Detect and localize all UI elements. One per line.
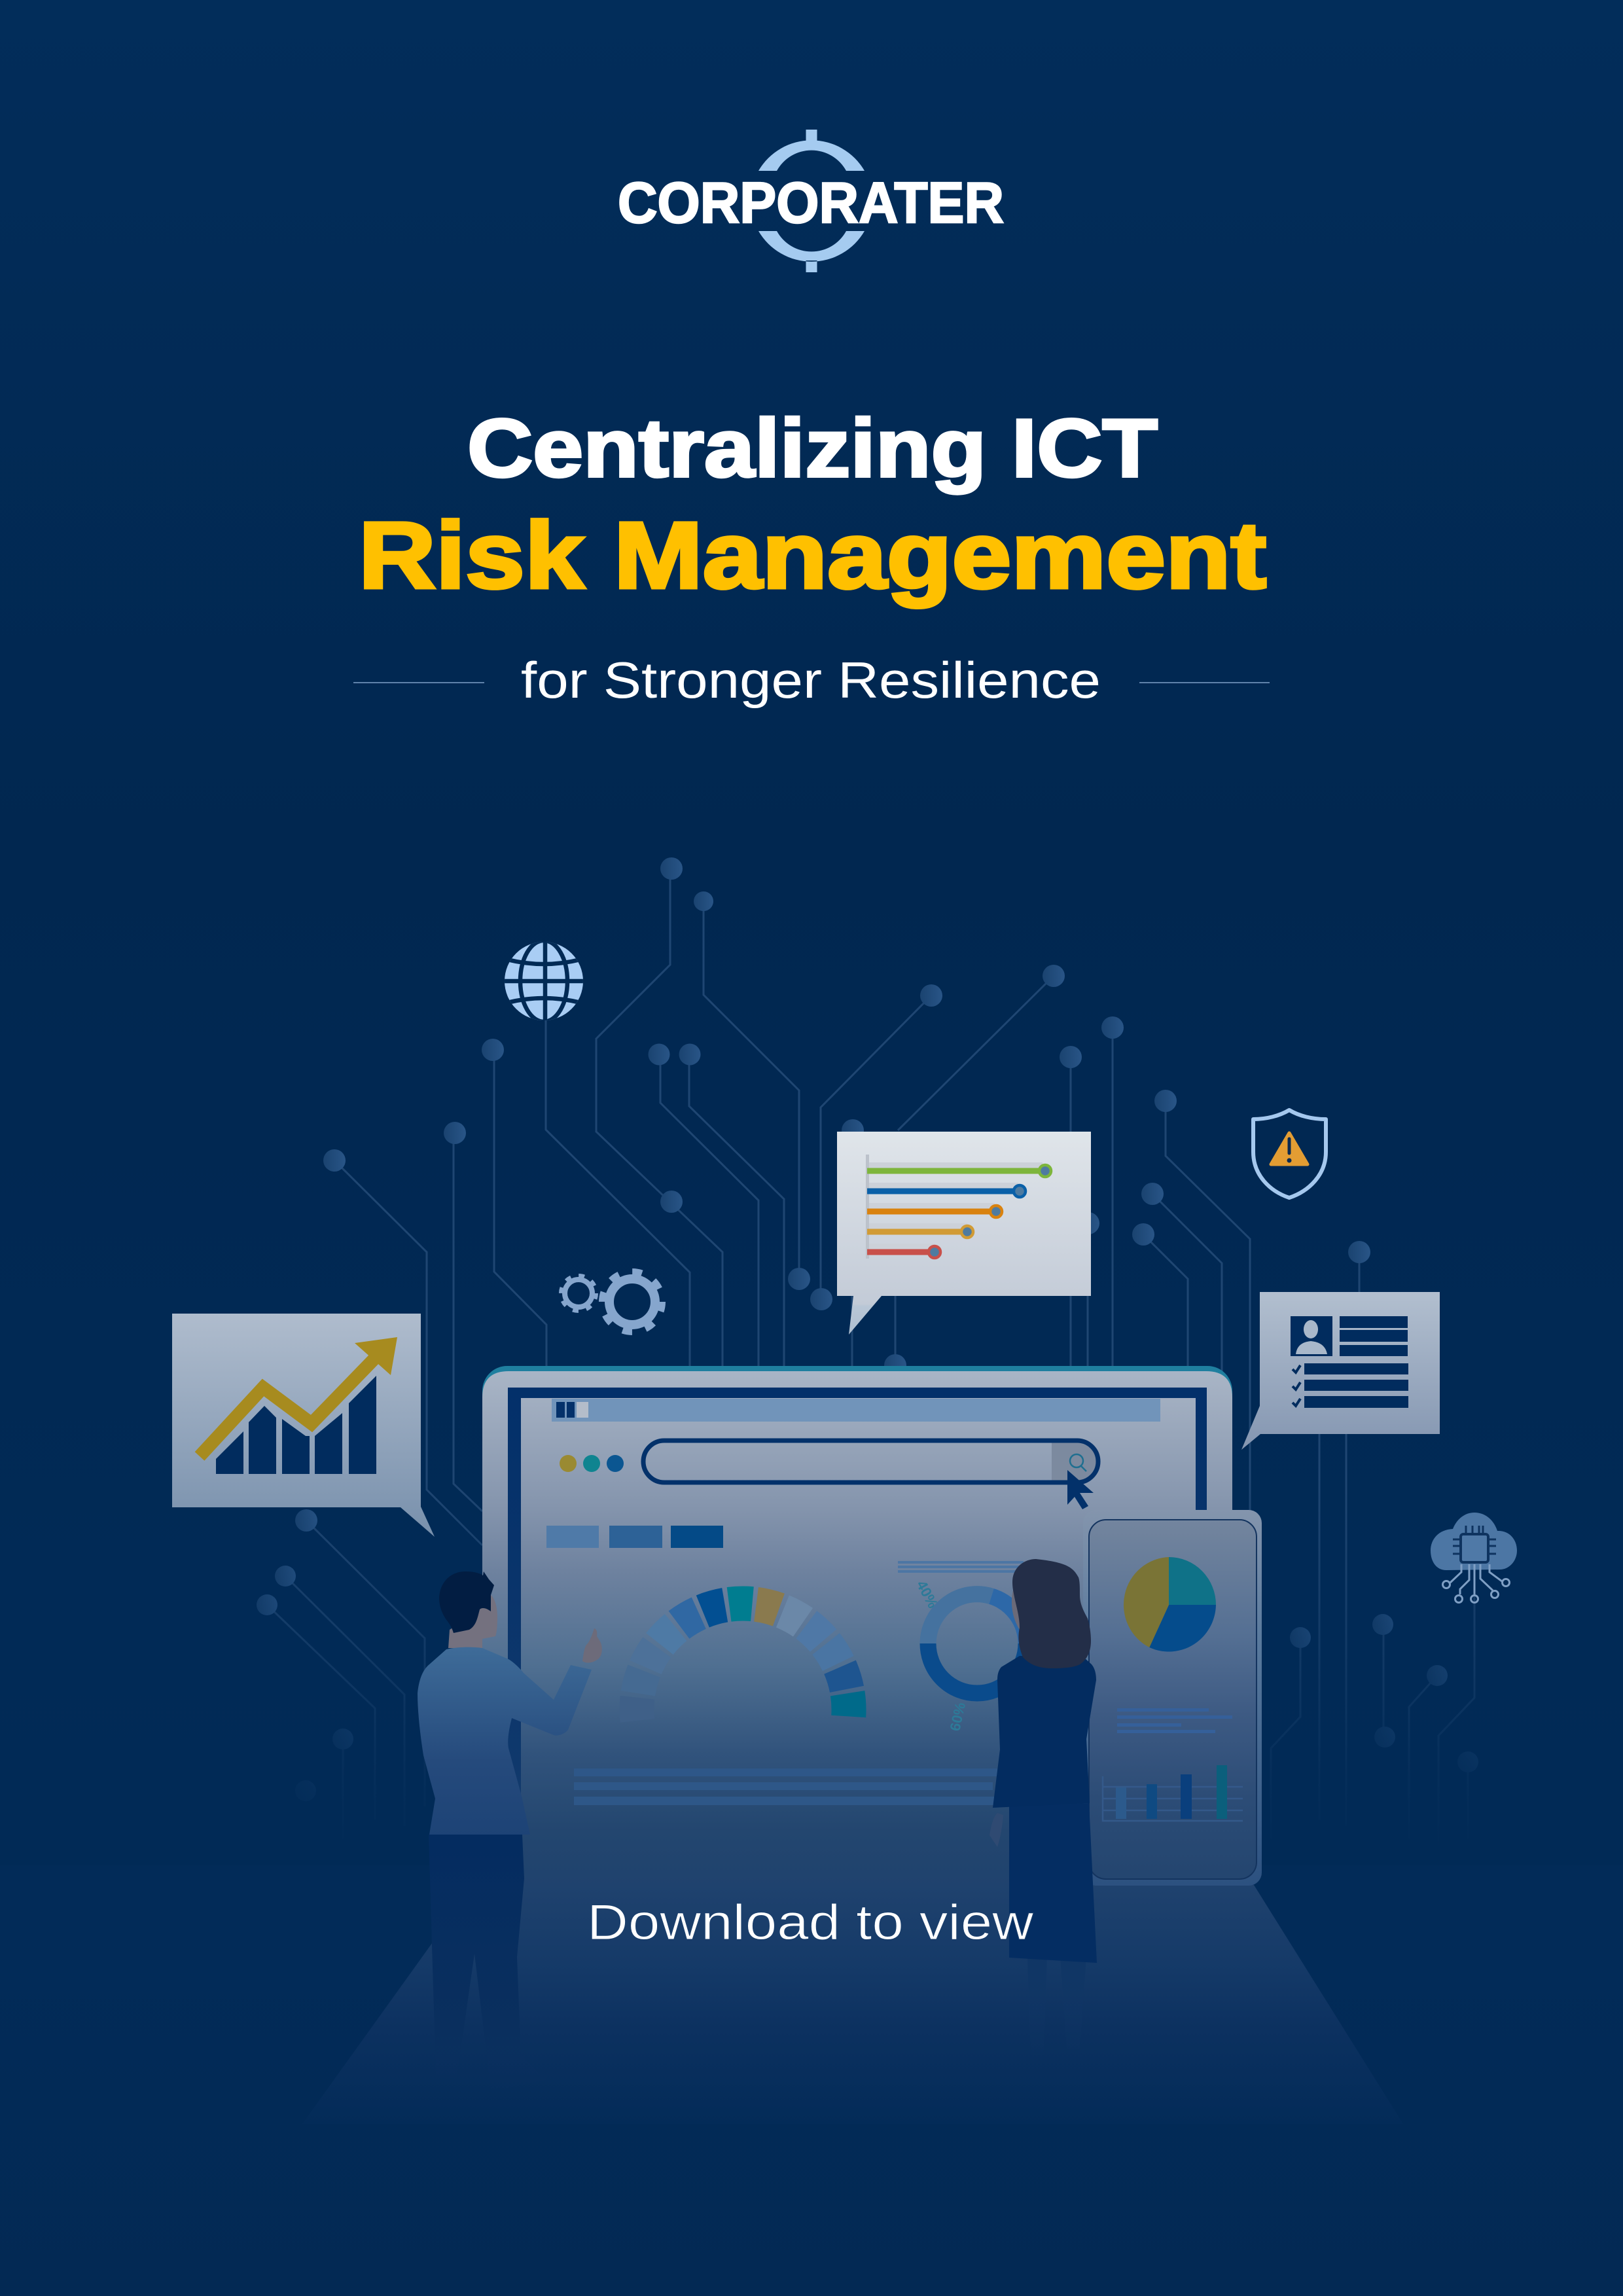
- man hair: [439, 1571, 494, 1633]
- tablet text lines: [1117, 1708, 1232, 1733]
- man hand: [582, 1628, 602, 1663]
- screen lower bars: [574, 1768, 997, 1805]
- chart shadow bars: [869, 1162, 1043, 1249]
- growth arrow: [200, 1337, 397, 1456]
- icon: cloud chip: [1431, 1513, 1517, 1602]
- woman skirt: [1009, 1803, 1097, 1963]
- title line 1: Centralizing ICT: [467, 402, 1158, 494]
- tablet screen: [1089, 1520, 1257, 1879]
- chart lollipop bars: [867, 1165, 1051, 1258]
- checkmarks: [1293, 1365, 1300, 1406]
- gauge chart: [637, 1604, 849, 1721]
- bubble: growth chart: [172, 1314, 435, 1537]
- tablet shell: [1083, 1510, 1262, 1886]
- monitor bezel: [508, 1388, 1207, 1888]
- monitor: [482, 1366, 1232, 1888]
- woman hair: [1012, 1559, 1091, 1668]
- tablet: [1083, 1510, 1262, 1886]
- icon: globe: [505, 942, 583, 1020]
- icon: gears: [561, 1272, 662, 1332]
- donut chart: 60%: [946, 1701, 969, 1732]
- logo: [618, 130, 1004, 272]
- screen text lines: [898, 1561, 1024, 1573]
- bubble: bar chart: [837, 1132, 1091, 1335]
- circuit nodes: [257, 857, 1478, 1801]
- floor: [302, 1885, 1403, 2124]
- logo ring: [758, 130, 865, 272]
- search field: [643, 1441, 1098, 1482]
- bubble: profile checklist: [1241, 1292, 1440, 1450]
- title line 2: Risk Management: [359, 503, 1266, 608]
- donut chart: [914, 1578, 1026, 1732]
- growth bars: [216, 1376, 376, 1474]
- woman hand: [990, 1813, 1003, 1847]
- window dots: [560, 1455, 624, 1472]
- man shirt: [418, 1647, 592, 1835]
- tablet bar chart: [1103, 1765, 1243, 1821]
- profile lines: [1304, 1316, 1408, 1408]
- logo wordmark: CORPORATER: [618, 170, 1004, 235]
- person: man: [418, 1571, 602, 2091]
- circuit lines: [267, 869, 1474, 1846]
- man skin: [448, 1595, 497, 1648]
- person: woman: [990, 1559, 1097, 2055]
- chart axis: [866, 1155, 869, 1259]
- woman legs: [1027, 1957, 1086, 2055]
- browser bar: [552, 1399, 1160, 1422]
- icon: cursor: [1067, 1470, 1094, 1509]
- subtitle: for Stronger Resilience: [521, 651, 1101, 709]
- woman face: [1012, 1590, 1022, 1630]
- monitor body: [482, 1371, 1232, 1888]
- woman jacket: [993, 1656, 1096, 1808]
- man legs: [429, 1835, 546, 2091]
- monitor top edge: [482, 1366, 1232, 1444]
- icon: warning shield: [1253, 1110, 1326, 1198]
- pie chart: [1124, 1557, 1216, 1652]
- call to action: Download to view: [587, 1895, 1034, 1950]
- avatar: [1291, 1316, 1332, 1356]
- monitor screen: [521, 1398, 1196, 1888]
- screen tabs: [546, 1526, 723, 1548]
- donut chart: 40%: [914, 1578, 941, 1611]
